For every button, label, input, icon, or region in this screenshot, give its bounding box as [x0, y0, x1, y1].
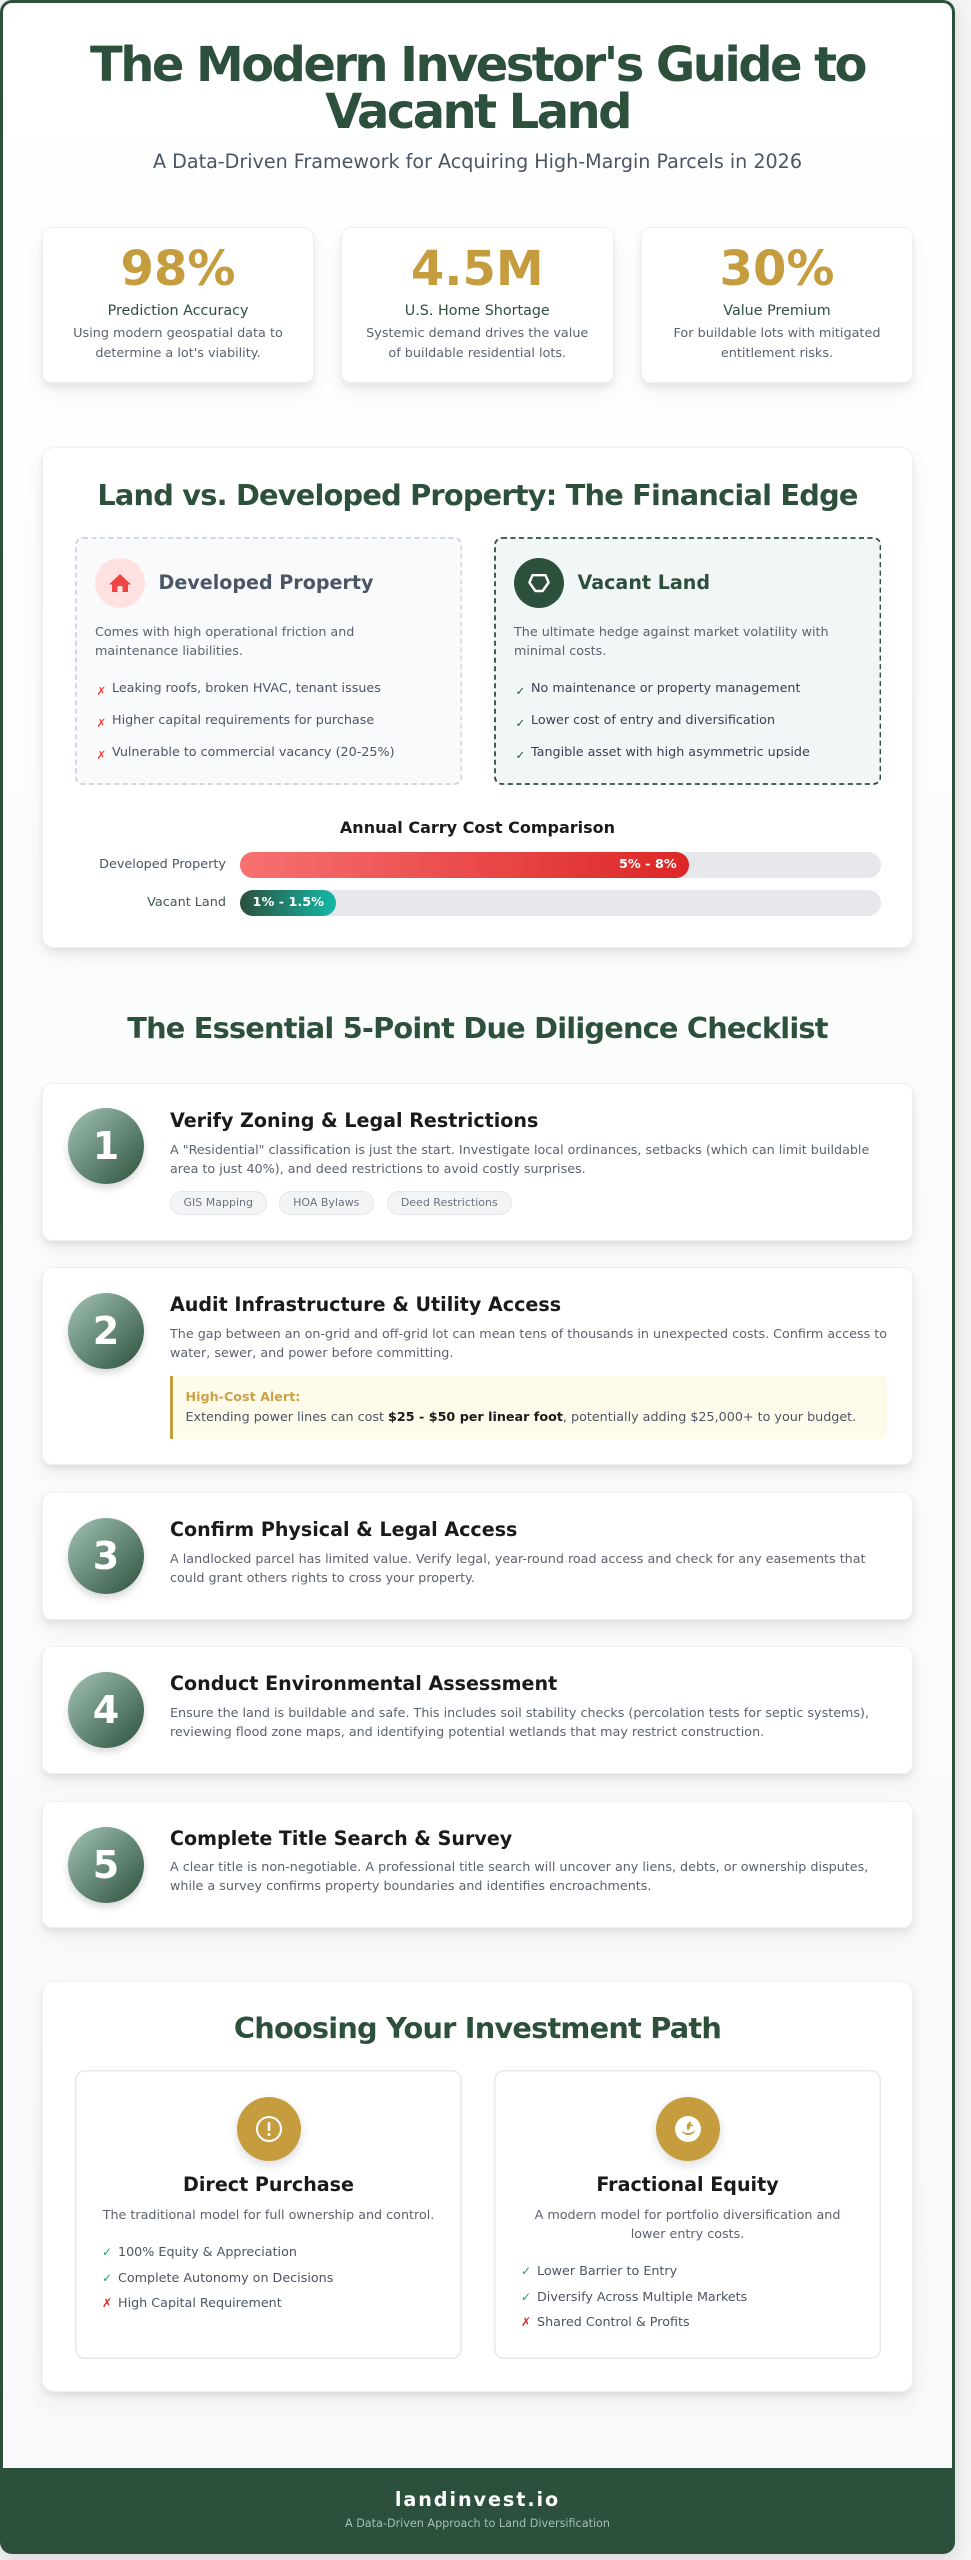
- checklist card 4: [42, 1646, 913, 1774]
- list item: ✓: [102, 2245, 112, 2259]
- panel: land vs developed property: [42, 447, 913, 948]
- stat description: Using modern geospatial data to: [73, 326, 283, 341]
- list item: ✗: [96, 748, 106, 762]
- step title: Confirm Physical & Legal Access: [170, 1518, 517, 1541]
- path title: Direct Purchase: [183, 2173, 354, 2196]
- list item: High Capital Requirement: [118, 2295, 282, 2310]
- card title: Vacant Land: [578, 571, 710, 594]
- callout: high-cost alert: [170, 1376, 887, 1439]
- icon: sprout: [656, 2097, 720, 2161]
- stat number: 98%: [121, 241, 235, 297]
- step description: Ensure the land is buildable and safe. This includes soil stability checks (percolation tests for septic systems),: [170, 1705, 869, 1720]
- chart title: Annual Carry Cost Comparison: [340, 818, 615, 837]
- bar label: Vacant Land: [147, 895, 226, 910]
- card description: minimal costs.: [514, 642, 606, 658]
- stat description: determine a lot's viability.: [95, 346, 261, 360]
- tag: Deed Restrictions: [401, 1196, 498, 1209]
- section heading: checklist: The Essential 5-Point Due Diligence Checklist: [127, 1011, 828, 1045]
- bar: developed property: 5% - 8%: [619, 857, 677, 872]
- number badge: [68, 1518, 144, 1594]
- stat card: home shortage: [341, 227, 614, 383]
- comparison card: developed property: [74, 537, 462, 785]
- card title: Developed Property: [158, 571, 373, 594]
- alert title: High-Cost Alert:: [186, 1389, 300, 1404]
- list item: Diversify Across Multiple Markets: [537, 2289, 747, 2304]
- footer brand: landinvest.io: [395, 2488, 560, 2511]
- stat label: Prediction Accuracy: [108, 303, 248, 319]
- list item: ✓: [521, 2264, 531, 2278]
- number badge: [68, 1827, 144, 1903]
- stat number: 30%: [720, 241, 834, 297]
- list item: Leaking roofs, broken HVAC, tenant issues: [112, 680, 381, 695]
- title: The Modern Investor's Guide to: [90, 36, 865, 92]
- number badge: [68, 1293, 144, 1369]
- checklist card 3: [42, 1492, 913, 1620]
- list item: Shared Control & Profits: [537, 2314, 690, 2329]
- list item: Lower Barrier to Entry: [537, 2263, 677, 2278]
- list item: ✓: [102, 2271, 112, 2285]
- number badge: 5: [93, 1843, 119, 1887]
- stat card: value premium: [641, 227, 913, 383]
- list item: ✓: [516, 684, 525, 698]
- bar label: Developed Property: [99, 857, 226, 872]
- list item: Complete Autonomy on Decisions: [118, 2270, 333, 2285]
- tag: HOA Bylaws: [293, 1196, 359, 1209]
- card description: maintenance liabilities.: [95, 642, 243, 658]
- title: [90, 36, 866, 140]
- stat label: Value Premium: [723, 303, 831, 319]
- step description: A "Residential" classification is just the start. Investigate local ordinances, setbacks (which can limit buildable: [170, 1142, 869, 1156]
- number badge: 1: [93, 1124, 119, 1168]
- panel: investment path: [42, 1981, 913, 2392]
- list item: ✗: [521, 2315, 531, 2329]
- icon: house: [94, 558, 144, 608]
- bar: vacant land: 1% - 1.5%: [253, 895, 324, 910]
- path description: The traditional model for full ownership and control.: [103, 2206, 434, 2222]
- step description: while a survey confirms property boundaries and identifies encroachments.: [170, 1878, 651, 1893]
- number badge: 4: [93, 1688, 119, 1732]
- path card: fractional equity: [494, 2070, 881, 2359]
- number badge: 3: [93, 1534, 119, 1578]
- stat card: prediction accuracy: [42, 227, 314, 383]
- step description: [170, 1550, 866, 1584]
- step description: area to just 40%), and deed restrictions to avoid costly surprises.: [170, 1160, 586, 1176]
- number badge: [68, 1108, 144, 1184]
- step title: Complete Title Search & Survey: [170, 1827, 512, 1850]
- comparison card: vacant land: [494, 537, 881, 785]
- list item: ✓: [521, 2290, 531, 2304]
- icon: alert circle: [236, 2097, 300, 2161]
- alert text: Extending power lines can cost $25 - $50 per linear foot, potentially adding $25,000+ to your budget.: [186, 1409, 856, 1424]
- stat description: [674, 326, 880, 360]
- bar chart: annual carry cost: [99, 818, 881, 916]
- stat description: [366, 326, 588, 360]
- list item: 100% Equity & Appreciation: [118, 2244, 297, 2259]
- card description: The ultimate hedge against market volatility with: [514, 624, 829, 638]
- list item: ✓: [516, 716, 525, 730]
- list item: Higher capital requirements for purchase: [112, 712, 374, 727]
- panel heading: Choosing Your Investment Path: [234, 2011, 721, 2045]
- number badge: [68, 1672, 144, 1748]
- path card: direct purchase: [75, 2070, 462, 2359]
- card description: [514, 624, 829, 658]
- step title: Conduct Environmental Assessment: [170, 1672, 557, 1695]
- icon: shield: [514, 558, 564, 608]
- stat description: For buildable lots with mitigated: [674, 326, 880, 341]
- stat description: [73, 326, 283, 360]
- step description: [170, 1705, 869, 1739]
- tag: [170, 1191, 266, 1215]
- step description: could grant others rights to cross your property.: [170, 1570, 475, 1584]
- footer: [0, 2468, 955, 2554]
- tag: GIS Mapping: [184, 1196, 253, 1209]
- number badge: 2: [93, 1309, 119, 1353]
- path description: A modern model for portfolio diversification and: [535, 2206, 840, 2222]
- path description: [534, 2206, 840, 2240]
- checklist card 5: [42, 1801, 913, 1928]
- path title: Fractional Equity: [596, 2173, 779, 2196]
- bar: vacant land: [240, 890, 881, 916]
- step description: [170, 1859, 868, 1893]
- step description: reviewing flood zone maps, and identifying potential wetlands that may restrict construction.: [170, 1724, 764, 1739]
- tag: [279, 1191, 374, 1215]
- stat description: entitlement risks.: [721, 346, 833, 360]
- stat description: Systemic demand drives the value: [366, 326, 588, 341]
- list item: ✗: [96, 684, 106, 698]
- step description: [170, 1326, 887, 1360]
- path description: lower entry costs.: [631, 2226, 744, 2240]
- list item: ✓: [516, 748, 525, 762]
- tag: [387, 1191, 512, 1215]
- step description: A landlocked parcel has limited value. Verify legal, year-round road access and check for any easements that: [170, 1550, 866, 1566]
- stat label: U.S. Home Shortage: [405, 303, 550, 319]
- list item: Tangible asset with high asymmetric upside: [531, 744, 810, 759]
- title: Vacant Land: [325, 84, 630, 140]
- checklist card 2: [42, 1267, 913, 1465]
- list item: Vulnerable to commercial vacancy (20-25%): [112, 744, 395, 759]
- list item: ✗: [102, 2296, 112, 2310]
- list item: Lower cost of entry and diversification: [531, 712, 775, 727]
- step title: Audit Infrastructure & Utility Access: [170, 1293, 561, 1316]
- stat description: of buildable residential lots.: [388, 346, 566, 360]
- step description: The gap between an on-grid and off-grid lot can mean tens of thousands in unexpected costs. Confirm access to: [170, 1326, 887, 1340]
- step title: Verify Zoning & Legal Restrictions: [170, 1109, 538, 1132]
- step description: A clear title is non-negotiable. A professional title search will uncover any liens, debts, or ownership disputes,: [170, 1859, 868, 1874]
- list item: ✗: [96, 716, 106, 730]
- bar: developed property: [240, 852, 881, 878]
- card description: Comes with high operational friction and: [95, 624, 354, 638]
- step description: [170, 1142, 869, 1176]
- subtitle: A Data-Driven Framework for Acquiring High-Margin Parcels in 2026: [153, 150, 802, 173]
- stat number: 4.5M: [411, 241, 544, 297]
- footer tagline: A Data-Driven Approach to Land Diversification: [345, 2517, 610, 2530]
- panel heading: Land vs. Developed Property: The Financial Edge: [97, 478, 858, 512]
- step description: water, sewer, and power before committing.: [170, 1344, 453, 1360]
- card description: [95, 624, 354, 658]
- checklist card 1: [42, 1083, 913, 1241]
- list item: No maintenance or property management: [531, 680, 800, 695]
